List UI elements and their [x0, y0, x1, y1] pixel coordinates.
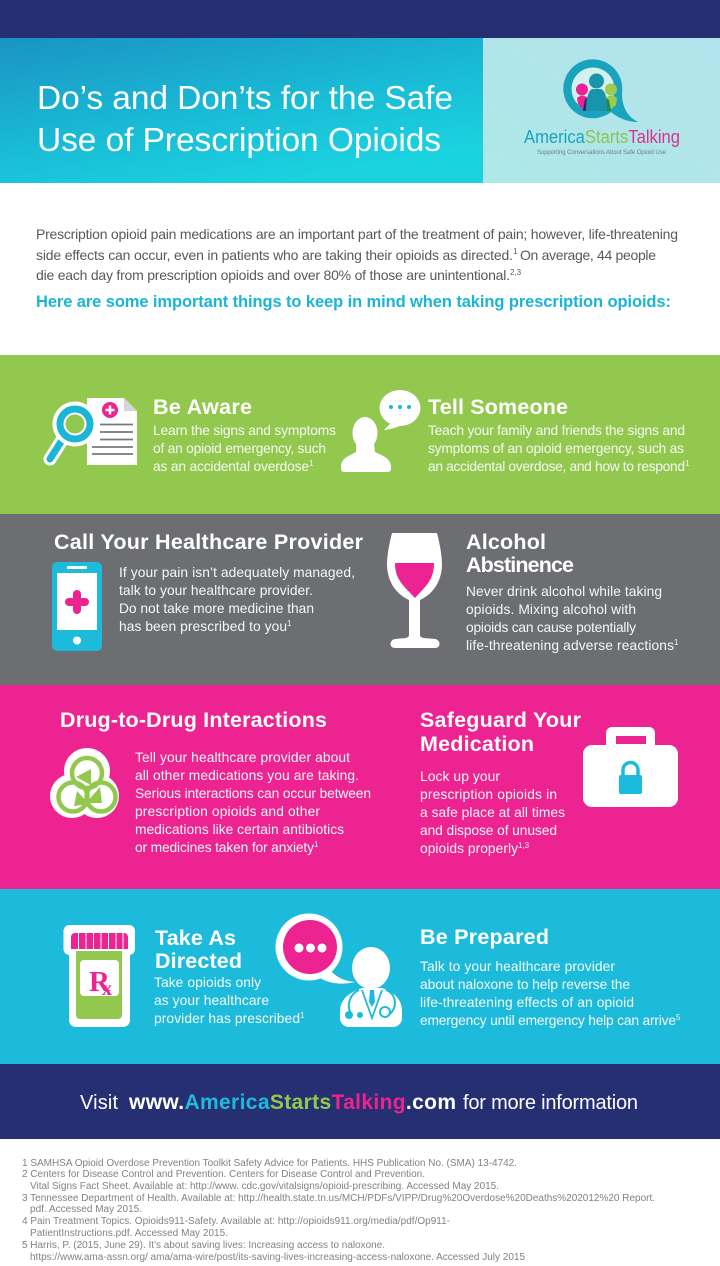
Drug-to-Drug Interactions: all other medications you are taking. [135, 768, 359, 783]
logo tagline: Supporting Conversations About Safe Opioid Use [537, 150, 667, 156]
title [37, 80, 453, 159]
Take As Directed: Take opioids only [154, 975, 261, 990]
intro paragraph: die each day from prescription opioids and over 80% of those are unintentional. [36, 267, 510, 283]
Be Prepared: Talk to your healthcare provider [420, 959, 615, 974]
Take As Directed: 1 [300, 1011, 305, 1020]
Be Prepared: emergency until emergency help can arrive [420, 1013, 676, 1028]
Safeguard Your Medication: and dispose of unused [420, 823, 557, 838]
call to action band [0, 1064, 720, 1139]
Take As Directed: as your healthcare [154, 993, 269, 1008]
Call Your Healthcare Provider: Call Your Healthcare Provider [54, 530, 364, 554]
Drug-to-Drug Interactions [60, 708, 371, 855]
Tell Someone: 1 [685, 459, 690, 468]
Alcohol Abstinence: Abstinence [466, 553, 574, 577]
Alcohol Abstinence: Never drink alcohol while taking [466, 584, 662, 599]
Drug-to-Drug Interactions: 1 [314, 840, 319, 849]
Take As Directed: Take As [155, 926, 236, 950]
Be Prepared: about naloxone to help reverse the [420, 977, 630, 992]
Call Your Healthcare Provider: talk to your healthcare provider. [119, 583, 313, 598]
Be Aware: Learn the signs and symptoms [153, 423, 336, 438]
intro paragraph: 1 [513, 247, 518, 256]
logo wordmark: AmericaStartsTalking [524, 127, 680, 147]
Alcohol Abstinence: life-threatening adverse reactions [466, 638, 674, 653]
Call Your Healthcare Provider: 1 [287, 619, 292, 628]
references: 2 Centers for Disease Control and Prevention. Centers for Disease Control and Prevention. [22, 1169, 425, 1180]
Be Prepared [420, 925, 681, 1028]
Tell Someone: Teach your family and friends the signs and [428, 423, 685, 438]
panel: cyan [0, 889, 720, 1064]
Tell Someone: Tell Someone [428, 395, 568, 419]
icon: wine glass [387, 533, 442, 648]
Tell Someone: symptoms of an opioid emergency, such as [428, 441, 684, 456]
Safeguard Your Medication [420, 708, 582, 856]
Safeguard Your Medication: prescription opioids in [420, 787, 557, 802]
Be Aware: of an opioid emergency, such [153, 441, 326, 456]
Drug-to-Drug Interactions: prescription opioids and other [135, 804, 320, 819]
references: PatientInstructions.pdf. Accessed May 2015. [30, 1228, 228, 1239]
Safeguard Your Medication: opioids properly [420, 841, 518, 856]
icon: person with speech bubble [341, 390, 420, 472]
icon: doctor with speech bubble [276, 914, 402, 1027]
Be Aware: as an accidental overdose [153, 459, 309, 474]
Alcohol Abstinence: opioids can cause potentially [466, 620, 636, 635]
Safeguard Your Medication: 1,3 [518, 841, 530, 850]
Be Aware: Be Aware [153, 395, 252, 419]
Alcohol Abstinence: opioids. Mixing alcohol with [466, 602, 636, 617]
references: 4 Pain Treatment Topics. Opioids911-Safety. Available at: http://opioids911.org/media/pdf/Op911- [22, 1216, 450, 1227]
Drug-to-Drug Interactions: Drug-to-Drug Interactions [60, 708, 327, 732]
intro paragraph: Prescription opioid pain medications are an important part of the treatment of pain; however, life-threatening [36, 226, 678, 242]
Be Aware: 1 [309, 459, 314, 468]
website line: Visit [80, 1092, 118, 1114]
Tell Someone [428, 395, 690, 474]
website line: www.AmericaStartsTalking.com [128, 1091, 456, 1114]
panel: pink [0, 685, 720, 889]
references: https://www.ama-assn.org/ ama/ama-wire/post/its-saving-lives-increasing-access-naloxone. Accessed July 2015 [30, 1252, 525, 1263]
panel: green [0, 355, 720, 514]
Call Your Healthcare Provider: has been prescribed to you [119, 619, 287, 634]
top navy band [0, 0, 720, 38]
Safeguard Your Medication: Safeguard Your [420, 708, 582, 732]
references: 5 Harris, P. (2015, June 29). It’s about saving lives: Increasing access to naloxone. [22, 1240, 385, 1251]
Be Aware [153, 395, 336, 474]
references: 1 SAMHSA Opioid Overdose Prevention Toolkit Safety Advice for Patients. HHS Publication No. (SMA) 13-4742. [22, 1158, 517, 1169]
Alcohol Abstinence [466, 530, 679, 653]
website line [80, 1091, 638, 1114]
references [22, 1158, 655, 1263]
Drug-to-Drug Interactions: or medicines taken for anxiety [135, 840, 314, 855]
Take As Directed [154, 926, 305, 1026]
Alcohol Abstinence: 1 [674, 638, 679, 647]
Call Your Healthcare Provider: If your pain isn’t adequately managed, [119, 565, 355, 580]
Take As Directed: provider has prescribed [154, 1011, 300, 1026]
intro paragraph: 2,3 [510, 268, 522, 277]
website line: for more information [463, 1092, 638, 1114]
Tell Someone: an accidental overdose, and how to respond [428, 459, 685, 474]
intro heading: Here are some important things to keep in mind when taking prescription opioids: [36, 293, 671, 311]
title: Use of Prescription Opioids [37, 122, 441, 159]
references: 3 Tennessee Department of Health. Available at: http://health.state.tn.us/MCH/PDFs/VIPP/Drug%20Overdose%20Deaths%202012%20 Report. [22, 1193, 655, 1204]
Be Prepared: Be Prepared [420, 925, 549, 949]
references: Vital Signs Fact Sheet. Available at: http://www. cdc.gov/vitalsigns/opioid-prescribing. Accessed May 2015. [30, 1181, 499, 1192]
icon: document and magnifier [50, 398, 137, 465]
intro paragraph: On average, 44 people [520, 247, 656, 263]
intro paragraph [36, 226, 678, 283]
header banner [0, 38, 483, 183]
Safeguard Your Medication: Medication [420, 732, 534, 756]
logo panel [483, 38, 720, 183]
Safeguard Your Medication: a safe place at all times [420, 805, 565, 820]
Drug-to-Drug Interactions: Tell your healthcare provider about [135, 750, 350, 765]
Be Prepared: 5 [676, 1013, 681, 1022]
icon: interlocking arrows [50, 748, 119, 818]
Alcohol Abstinence: Alcohol [466, 530, 546, 554]
icon: prescription bottle [64, 925, 135, 1027]
icon: phone [52, 562, 102, 651]
Drug-to-Drug Interactions: medications like certain antibiotics [135, 822, 344, 837]
icon: prescription bottle: R [89, 966, 111, 998]
references: pdf. Accessed May 2015. [30, 1204, 142, 1215]
intro paragraph: side effects can occur, even in patients who are taking their opioids as directed. [36, 247, 513, 263]
icon: prescription bottle: x [102, 978, 112, 1000]
title: Do’s and Don’ts for the Safe [37, 80, 453, 117]
Drug-to-Drug Interactions: Serious interactions can occur between [135, 786, 371, 801]
icon: speech ring with people [563, 59, 638, 122]
icon: locked case [583, 727, 678, 807]
panel: gray [0, 514, 720, 685]
Take As Directed: Directed [155, 949, 242, 973]
Safeguard Your Medication: Lock up your [420, 769, 500, 784]
Call Your Healthcare Provider [54, 530, 364, 634]
Be Prepared: life-threatening effects of an opioid [420, 995, 634, 1010]
Call Your Healthcare Provider: Do not take more medicine than [119, 601, 314, 616]
